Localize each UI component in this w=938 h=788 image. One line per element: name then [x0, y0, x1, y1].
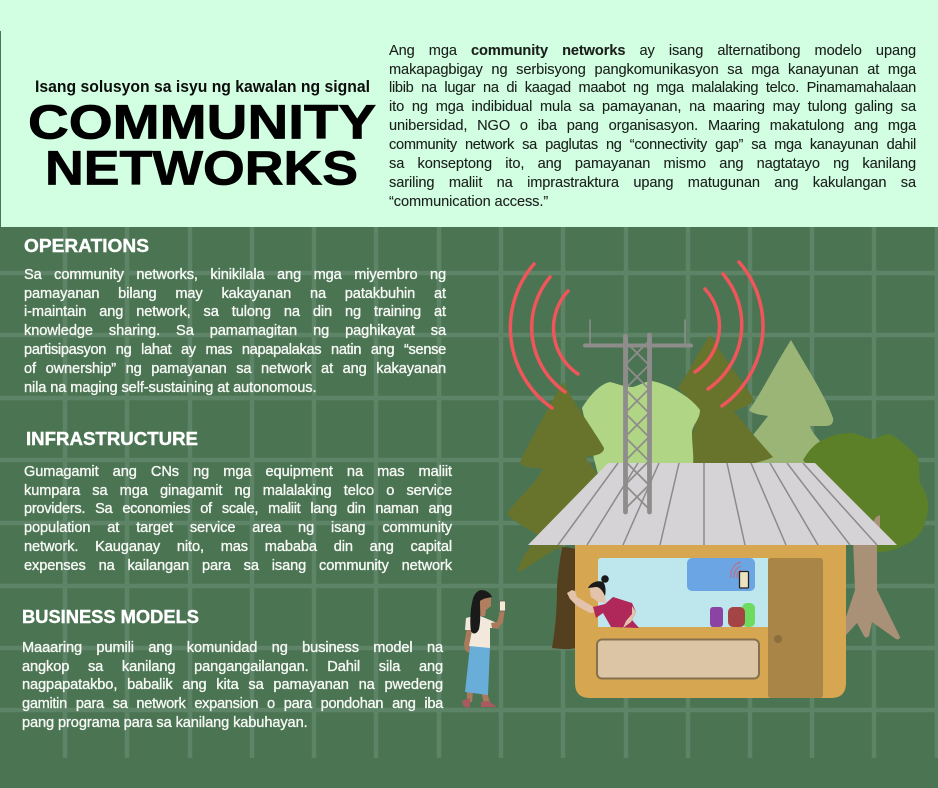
text: operations: of ownership” ng pamayanan sa network at ang kakayanan: [24, 361, 446, 377]
second arm: [623, 606, 636, 628]
main title line 1: COMMUNITY: [28, 96, 376, 150]
intro paragraph: sa konseptong ito, ang pamayanan mismo ang nagtatayo ng kanilang: [389, 156, 916, 172]
trunk: left tree: [552, 547, 576, 649]
intro paragraph: [389, 43, 916, 210]
window: [598, 558, 768, 627]
intro paragraph: community network sa paglutas ng “connectivity gap” sa mga kanayunan dahil: [389, 137, 916, 153]
face: [589, 585, 606, 603]
tree: left olive: [507, 382, 604, 550]
intro paragraph: makapagbigay ng serbisyong pangkomunikasyon sa mga kanayunan at mga: [389, 62, 916, 78]
intro paragraph: Ang mga community networks ay isang alternatibong modelo upang: [389, 43, 916, 59]
shopkeeper in window: [567, 575, 639, 628]
text: business models: pang programa para sa kanilang kabuhayan.: [22, 715, 308, 731]
legs: [467, 692, 490, 703]
bush: right dark green: [803, 433, 928, 552]
text: operations: knowledge sharing. Sa pamamagitan ng paghikayat sa: [24, 323, 446, 339]
text: business models: gamitin para sa network expansion o para pondohan ang iba: [22, 696, 443, 712]
signal waves: left: [510, 264, 578, 408]
intro paragraph: sariling maliit na imprastraktura upang matugunan ang kakulangan sa: [389, 175, 916, 191]
right arm: [491, 609, 505, 629]
icon: wifi signal on poster: [731, 562, 741, 578]
icon: phone on poster: [740, 572, 748, 588]
tree: pale olive: [749, 340, 833, 470]
intro paragraph: libib na lugar na di kaagad maabot ng mga malalaking telco. Pinamamahalaan: [389, 80, 916, 96]
intro paragraph: “communication access.”: [389, 194, 548, 210]
house: [575, 545, 846, 698]
text: infrastructure: network. Kauganay nito, mas mababa din ang capital: [24, 539, 452, 555]
heading: infrastructure: INFRASTRUCTURE: [26, 429, 198, 449]
shoes: [462, 698, 496, 707]
tree: lower left branch: [518, 545, 562, 573]
main title line 2: NETWORKS: [45, 142, 358, 196]
intro paragraph: unibersidad, NGO o iba pang organisasyon. Maaring makatulong ang mga: [389, 118, 916, 134]
door knob: [774, 635, 782, 643]
text: infrastructure: population at target service area ng isang community: [24, 520, 452, 536]
skirt: [465, 646, 490, 695]
hair: [470, 590, 492, 633]
text: business models: nagpapatakbo, babalik ang kita sa pamayanan na pwedeng: [22, 677, 443, 693]
left arm: [464, 628, 472, 653]
roof: [528, 463, 897, 545]
arm: [567, 590, 596, 613]
intro paragraph: ito ng mga indibidual mula sa pamayanan, na maaring may tulong galing sa: [389, 99, 916, 115]
text: operations: [24, 267, 446, 396]
product: purple bottle: [710, 607, 723, 627]
phone: [500, 601, 506, 611]
text: infrastructure: [24, 464, 452, 574]
signal waves: right: [695, 262, 763, 406]
counter panel: [597, 640, 759, 678]
tree: middle olive: [678, 335, 773, 464]
head: [477, 596, 491, 616]
shirt: [465, 615, 497, 648]
text: operations: nila na maging self-sustaining at autonomous.: [24, 380, 316, 396]
product: green bottle: [742, 603, 755, 627]
poster: blue: [687, 558, 755, 591]
heading: business models: BUSINESS MODELS: [22, 607, 199, 627]
title block: [28, 77, 376, 196]
text: infrastructure: kumpara sa mga ginagamit ng malalaking telco o service: [24, 482, 452, 498]
text: operations: i-maintain ang network, sa tulong na din ng training at: [24, 304, 446, 320]
bush: light green: [582, 381, 700, 474]
trunk: right tree: [846, 540, 900, 639]
woman with phone: [462, 590, 506, 707]
radio tower: [585, 320, 691, 512]
text: business models: angkop sa kanilang pangangailangan. Dahil sila ang: [22, 658, 443, 674]
shirt: [593, 597, 639, 628]
door: [768, 558, 823, 698]
subtitle: Isang solusyon sa isyu ng kawalan ng signal: [35, 77, 370, 96]
product: red bottle: [728, 607, 745, 627]
heading: operations: OPERATIONS: [24, 236, 149, 256]
house body: [575, 545, 846, 698]
text: operations: partisipasyon ng lahat ay mas napapalakas natin ang “sense: [24, 342, 446, 358]
text: operations: pamayanan bilang may kakayanan na patakbuhin at: [24, 286, 446, 302]
text: business models: Maaaring pumili ang komunidad ng business model na: [22, 640, 443, 656]
trunk: right tree upper branch: [872, 515, 880, 532]
hair: [588, 581, 606, 596]
text: infrastructure: providers. Sa economies of scale, maliit lang din naman ang: [24, 501, 452, 517]
text: operations: Sa community networks, kinikilala ang mga miyembro ng: [24, 267, 446, 283]
text: infrastructure: expenses na kailangan para sa isang community network: [24, 558, 452, 574]
hair bun: [601, 575, 609, 583]
text: infrastructure: Gumagamit ang CNs ng mga equipment na mas maliit: [24, 464, 452, 480]
text: business models: [22, 640, 444, 731]
